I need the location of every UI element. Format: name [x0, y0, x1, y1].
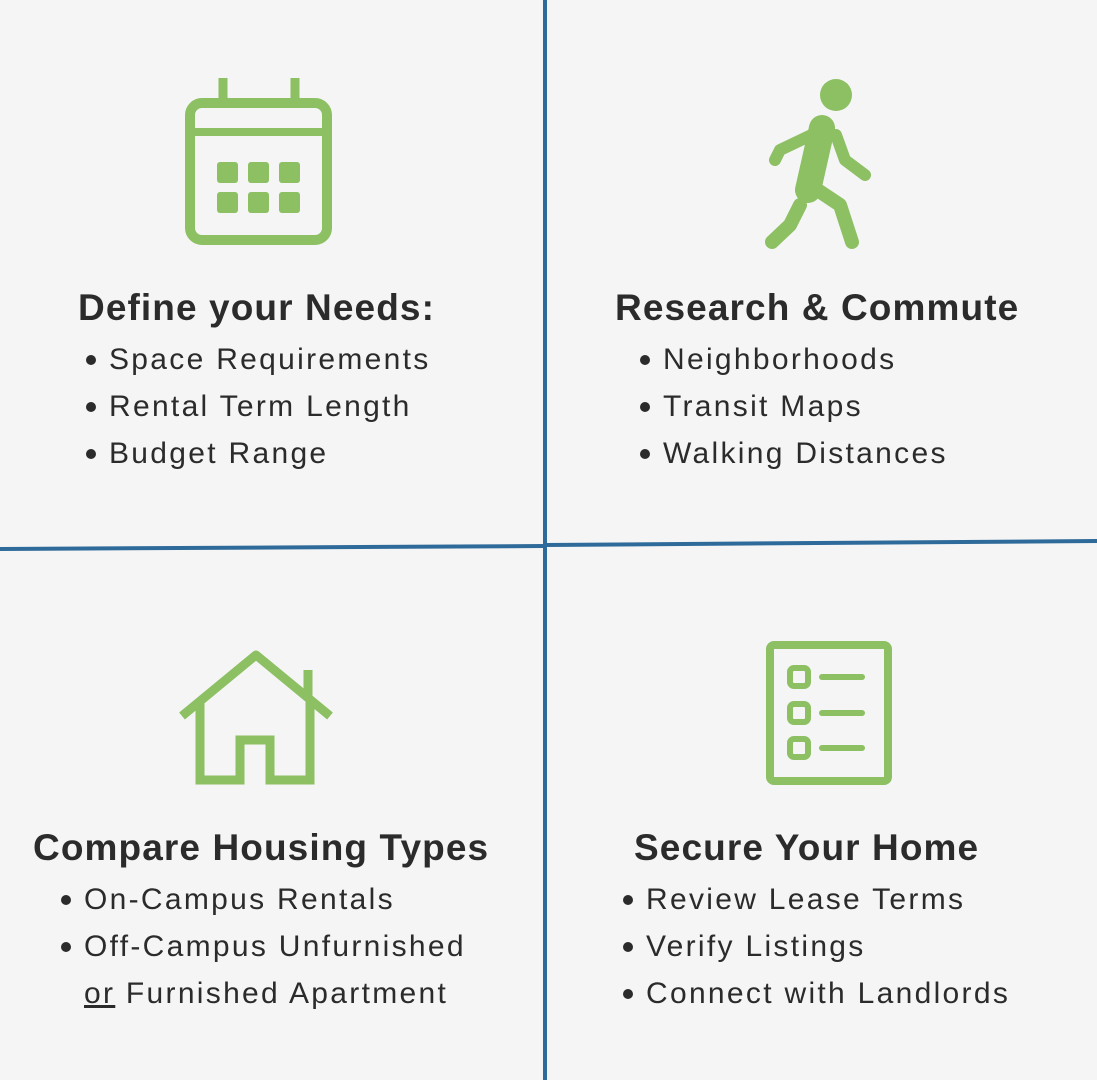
list: needs: Space Requirements: [109, 343, 431, 376]
list: compare: Off-Campus Unfurnished: [84, 930, 466, 963]
list: secure: Connect with Landlords: [646, 977, 1010, 1010]
heading: compare: Compare Housing Types: [33, 827, 489, 868]
list: research: Transit Maps: [663, 390, 863, 423]
heading: define needs: Define your Needs:: [78, 287, 435, 328]
icon: walking person: [765, 79, 871, 249]
heading: secure: Secure Your Home: [634, 827, 979, 868]
list: secure: [623, 883, 1010, 1010]
list: secure: Review Lease Terms: [646, 883, 965, 916]
list: secure: Verify Listings: [646, 930, 866, 963]
icon: calendar: [185, 78, 332, 245]
heading: research: Research & Commute: [615, 287, 1019, 328]
list: compare: [61, 883, 466, 1010]
list: compare: or Furnished Apartment: [84, 977, 448, 1010]
list: needs: [86, 343, 431, 470]
list: research: [640, 343, 948, 470]
list: needs: Budget Range: [109, 437, 328, 470]
list: research: Walking Distances: [663, 437, 948, 470]
list: needs: Rental Term Length: [109, 390, 412, 423]
list: research: Neighborhoods: [663, 343, 896, 376]
icon: checklist: [766, 641, 892, 785]
list: compare: On-Campus Rentals: [84, 883, 395, 916]
icon: house: [179, 650, 333, 784]
